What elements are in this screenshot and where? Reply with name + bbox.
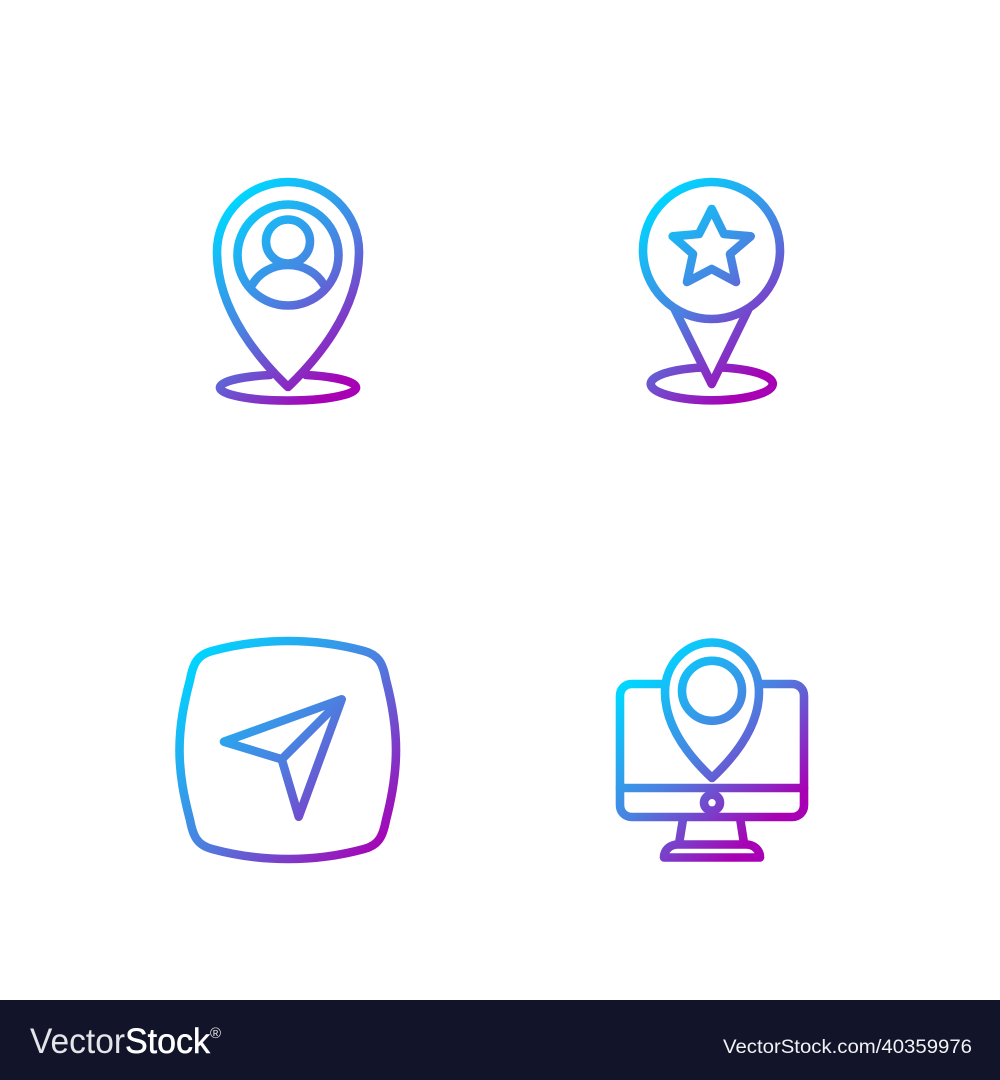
location pin [665, 642, 759, 778]
pin head circle [643, 182, 780, 319]
image id: VectorStock.com/40359976 [723, 1037, 972, 1058]
monitor base [664, 844, 760, 858]
paper plane arrow [224, 699, 342, 817]
user badge circle [238, 204, 338, 306]
star [673, 209, 751, 282]
pin point [675, 310, 748, 384]
user head [266, 220, 310, 264]
pin outline [217, 182, 359, 387]
rounded square frame [180, 641, 396, 859]
screen baseline [620, 784, 804, 792]
footer bar [0, 1000, 1000, 1080]
ground ellipse [220, 375, 356, 401]
brand logo text: Vector [30, 1022, 125, 1061]
icon: navigation arrow in rounded square [180, 641, 396, 859]
icon: map pin with user [217, 182, 359, 401]
monitor stand [679, 821, 744, 842]
icon: map pin with star [643, 182, 780, 400]
power button [704, 795, 720, 811]
brand logo bold text: Stock [125, 1022, 210, 1061]
ground ellipse [651, 368, 773, 400]
user shoulders [252, 265, 324, 285]
pin inner circle [682, 661, 742, 721]
icon: desktop monitor with location pin [620, 642, 804, 858]
registered mark: ® [210, 1025, 221, 1042]
monitor body [620, 684, 804, 817]
